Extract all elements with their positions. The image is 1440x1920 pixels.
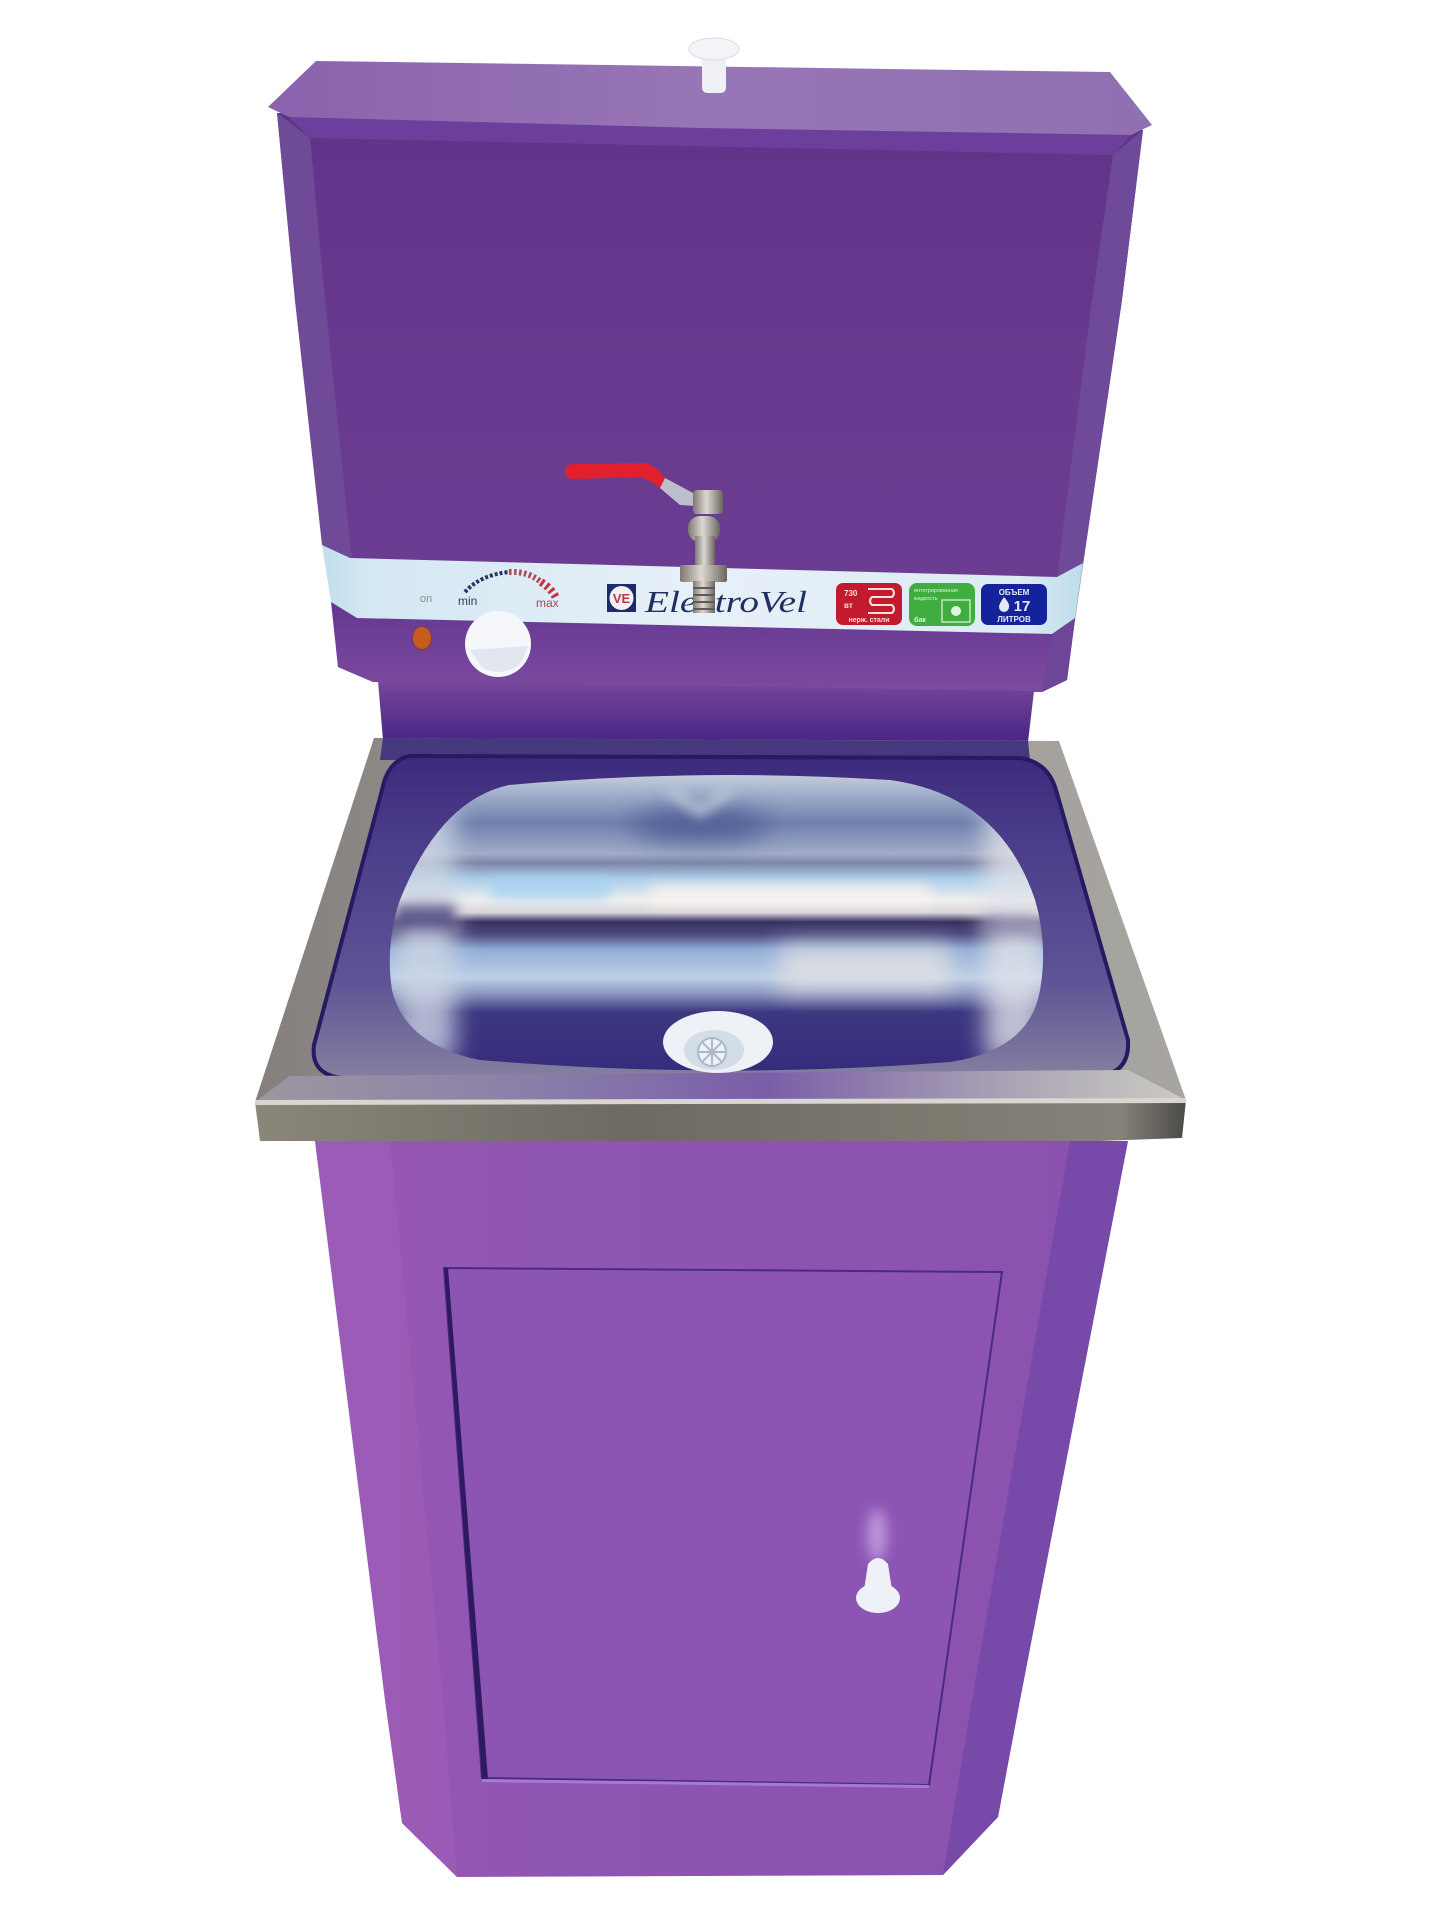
brand name: ElectroVel [644, 584, 807, 619]
sink rim [255, 738, 1186, 1102]
badge: volume 17 litres: ОБЪЕМ [999, 588, 1030, 597]
badge: 730 W stainless: вт [844, 601, 853, 610]
tap body [693, 490, 723, 514]
tank bevel left [277, 113, 352, 560]
temperature scale min: min [458, 594, 477, 608]
badge: volume 17 litres: ЛИТРОВ [997, 615, 1031, 624]
product photo: purple washstand with heated tank [255, 38, 1186, 1877]
tank neck [378, 681, 1034, 742]
brand logo: VE [613, 591, 630, 606]
badge: integrated tank: жидкость [914, 596, 938, 602]
lower tank strip [331, 602, 1075, 692]
badge: integrated tank: интегрированная [914, 588, 958, 594]
lever neck [660, 478, 695, 506]
sink bowl [380, 770, 1060, 1080]
tank lid front edge [289, 117, 1131, 155]
tank label band [322, 545, 1083, 634]
power label on: on [420, 593, 432, 605]
tap lever [565, 463, 665, 488]
tap hose thread [693, 581, 715, 613]
cabinet right side shade [943, 1141, 1128, 1875]
tank bevel right [1057, 130, 1143, 577]
cabinet left side shade [315, 1141, 457, 1877]
badge: 730 W stainless [836, 583, 902, 625]
badge: 730 W stainless: нерж. стали [848, 617, 890, 624]
badge: 730 W stainless: 730 [844, 589, 858, 598]
brand logo [607, 584, 636, 612]
power indicator lamp [412, 626, 432, 650]
sink front edge [255, 1100, 1186, 1141]
badge: volume 17 litres [981, 584, 1047, 625]
door bottom highlight [482, 1779, 929, 1788]
lower right bevel [1042, 618, 1075, 692]
stainless sink [255, 738, 1186, 1141]
tap spout ring [688, 516, 720, 542]
tank body [277, 113, 1143, 692]
tap with red lever [565, 463, 727, 613]
cabinet body [315, 1141, 1128, 1877]
temperature arc ticks [465, 572, 556, 598]
tap spout [695, 536, 715, 568]
cabinet door [444, 1268, 1002, 1785]
filler cap [689, 38, 739, 93]
tank lid top [268, 61, 1152, 135]
temperature scale max: max [536, 596, 559, 610]
back deck [380, 738, 1030, 760]
door handle [856, 1509, 900, 1613]
drain [663, 1011, 773, 1073]
door left gap shadow [444, 1268, 488, 1779]
badge: integrated tank: бак [914, 616, 926, 624]
tap nut [680, 565, 727, 582]
thermostat dial [465, 611, 531, 677]
sink front deck strip [255, 1070, 1186, 1102]
badge: volume 17 litres: 17 [1014, 598, 1030, 615]
cabinet [315, 1141, 1128, 1877]
water tank [268, 38, 1152, 692]
badge: integrated tank [909, 583, 975, 626]
sink recess [314, 756, 1128, 1078]
